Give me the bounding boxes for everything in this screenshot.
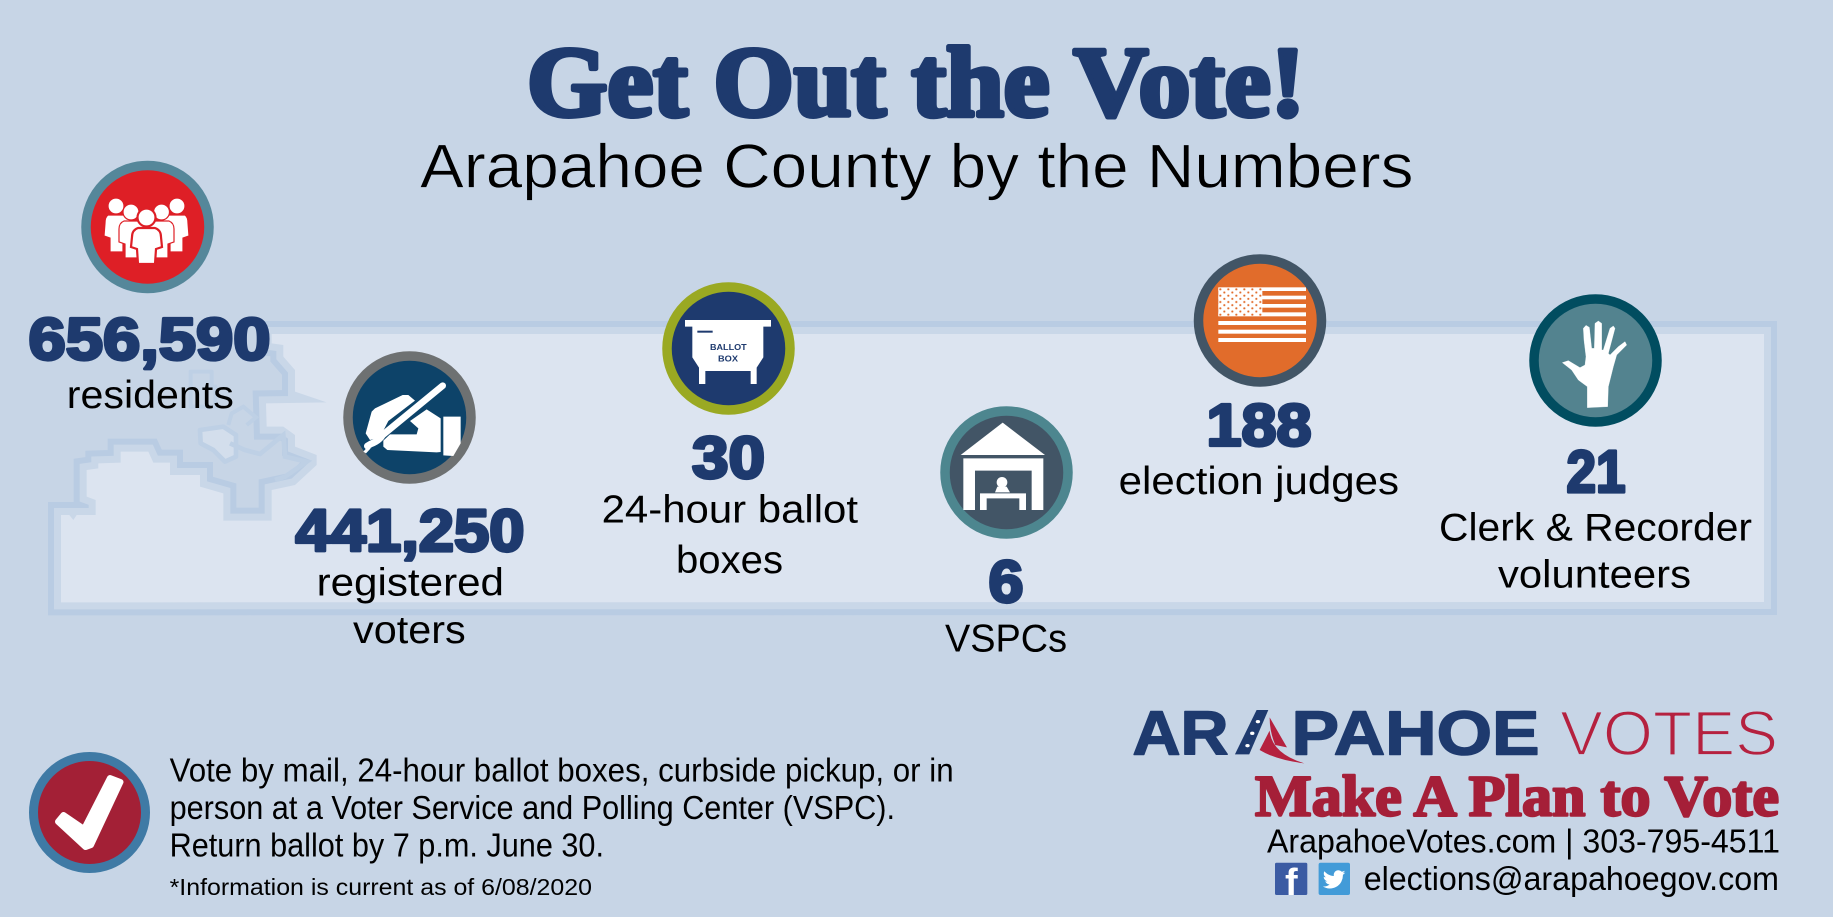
text block: how to vote: Vote by mail, 24-hour ballot boxes, curbside pickup, or in xyxy=(170,752,954,789)
icon: hand writing xyxy=(348,356,471,479)
text block: how to vote: person at a Voter Service and Polling Center (VSPC). xyxy=(170,789,895,826)
subtitle: Arapahoe County by the Numbers xyxy=(420,133,1414,202)
label: voters: voters xyxy=(353,609,466,652)
title: Get Out the Vote! xyxy=(527,26,1305,138)
label: registered: registered xyxy=(317,562,504,605)
stat: election judges xyxy=(1119,259,1399,503)
logo: Arapahoe Votes: VOTES xyxy=(1560,699,1778,769)
contact: email: elections@arapahoegov.com xyxy=(1364,860,1779,897)
label: residents: residents xyxy=(67,374,234,417)
icon: facebook xyxy=(1275,862,1307,904)
stat: Clerk and Recorder volunteers xyxy=(1439,299,1752,597)
icon: ballot box xyxy=(667,287,790,410)
stat: VSPCs xyxy=(945,411,1068,661)
logo: Arapahoe Votes: PAHOE xyxy=(1292,700,1540,768)
label: volunteers: volunteers xyxy=(1498,554,1691,597)
icon: check mark xyxy=(34,756,146,868)
label: VSPCs: VSPCs xyxy=(945,618,1067,661)
text block: how to vote: Return ballot by 7 p.m. June 30. xyxy=(170,827,604,864)
stat: 24-hour ballot boxes xyxy=(602,287,858,582)
stat: registered voters xyxy=(296,356,524,652)
icon: twitter xyxy=(1319,863,1350,895)
label: 24-hour ballot: 24-hour ballot xyxy=(602,488,858,531)
label: boxes: boxes xyxy=(676,539,783,582)
number: 188: 188 xyxy=(1206,393,1312,459)
logo mark: flag letter A xyxy=(1235,710,1304,763)
icon: polling center building xyxy=(945,411,1068,534)
stat: residents xyxy=(28,166,270,417)
icon: facebook: f xyxy=(1285,862,1298,904)
label: election judges: election judges xyxy=(1119,460,1399,503)
label: Clerk and Recorder: Clerk & Recorder xyxy=(1439,507,1752,550)
number: 21: 21 xyxy=(1566,439,1626,505)
icon: raised hand xyxy=(1534,299,1657,422)
heading: Make A Plan to Vote: Make A Plan to Vote xyxy=(1255,764,1779,828)
number: 30: 30 xyxy=(692,425,765,491)
icon: ballot box: BALLOT xyxy=(710,342,747,352)
text block: how to vote xyxy=(170,752,954,864)
panel: county map outline xyxy=(30,310,1764,602)
icon: american flag xyxy=(1198,259,1322,382)
number: 656,590: 656,590 xyxy=(28,306,270,372)
footnote: *Information is current as of 6/08/2020 xyxy=(170,874,592,900)
contact: website and phone: ArapahoeVotes.com | 303-795-4511 xyxy=(1267,823,1780,860)
icon: crowd of people xyxy=(86,166,209,288)
number: 441,250: 441,250 xyxy=(296,498,524,564)
logo: Arapahoe Votes: AR xyxy=(1132,700,1228,768)
number: 6: 6 xyxy=(988,549,1024,615)
logo: Arapahoe Votes xyxy=(1132,699,1778,769)
icon: ballot box: BOX xyxy=(718,353,738,363)
